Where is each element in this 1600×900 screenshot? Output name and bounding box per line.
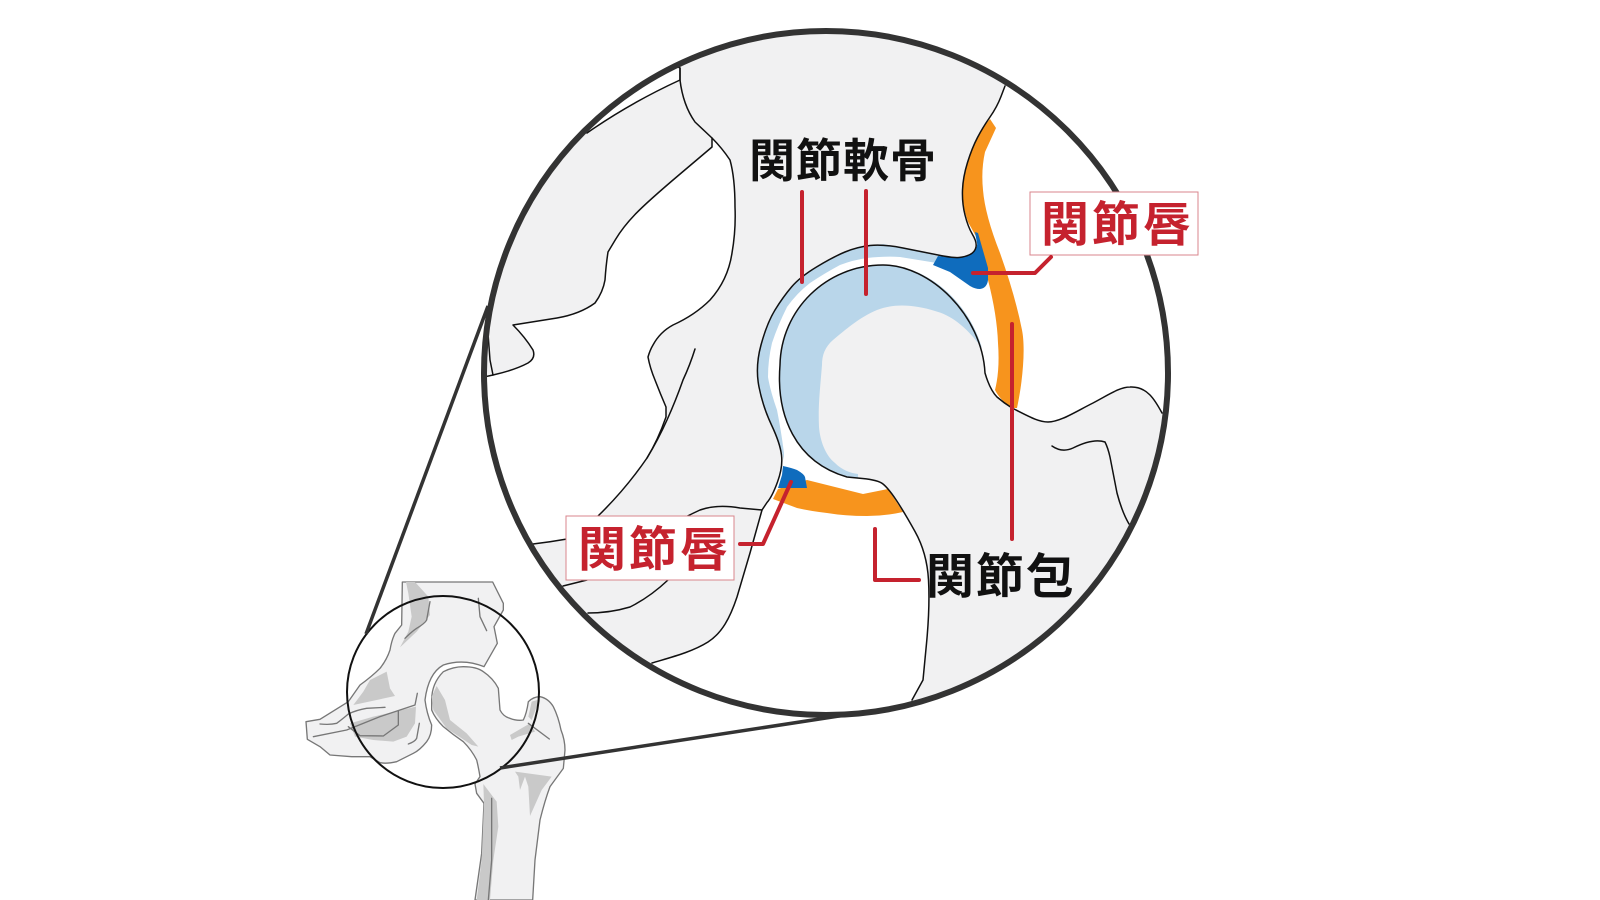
label leader lines: [802, 191, 1012, 580]
bone area inside circle: [484, 31, 1168, 715]
overview pelvis: [306, 582, 503, 763]
label: lower labrum: [566, 482, 791, 580]
label: upper labrum: [973, 192, 1198, 273]
hip joint diagram: [305, 28, 1198, 900]
labrum: lower blue: [778, 466, 807, 488]
joint capsule: upper right orange band: [963, 119, 1024, 408]
small overview illustration: pelvis and femur: [306, 582, 565, 900]
small circle marking the zoomed area: [347, 596, 539, 788]
overview femur: [432, 667, 565, 900]
upper labrum leader: [973, 257, 1051, 273]
label: articular cartilage: 関節軟骨: [749, 135, 937, 187]
lower labrum label text: 関節唇: [578, 524, 731, 577]
lower labrum leader: [740, 482, 791, 544]
white gap around the joint: [652, 86, 1165, 712]
upper labrum label box: [1030, 192, 1198, 255]
white pocket: upper left: [470, 138, 735, 550]
femoral head cartilage: [779, 265, 982, 478]
labrum: upper blue: [933, 232, 988, 289]
acetabulum and femur outlines: [487, 68, 1162, 700]
label: joint capsule: 関節包: [926, 551, 1076, 604]
enlarged hip joint circle: [481, 28, 1171, 718]
acetabular cartilage: [757, 244, 938, 460]
overview shaded bone areas: [350, 582, 552, 900]
joint capsule: lower orange band: [773, 480, 903, 516]
upper labrum label text: 関節唇: [1041, 199, 1194, 252]
anatomy clipped to circle: [487, 67, 1165, 712]
white sliver: upper rim: [586, 67, 681, 134]
big circle outline: [484, 31, 1168, 715]
overview bone detail lines: [313, 598, 549, 900]
lower labrum label box: [566, 516, 734, 580]
zoom connector lines: [366, 306, 852, 768]
